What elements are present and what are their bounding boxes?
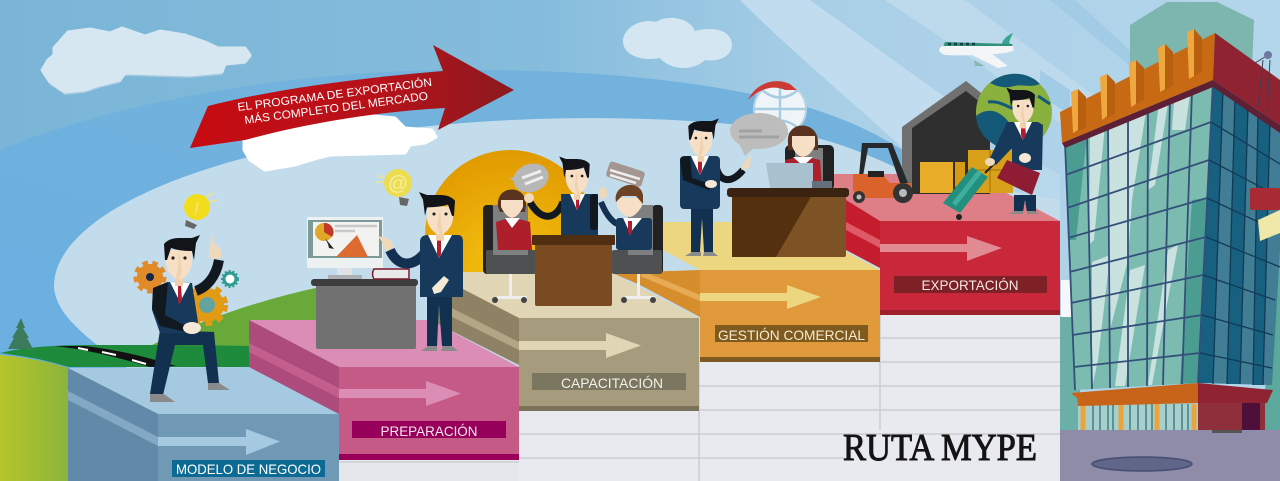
speech bubble: right xyxy=(605,161,646,187)
icon: light bulb xyxy=(184,193,217,229)
monitor with charts xyxy=(307,217,383,279)
front glass face xyxy=(1065,82,1213,390)
icon: airplane xyxy=(939,33,1014,68)
storefront xyxy=(1078,402,1198,430)
canopy xyxy=(1071,383,1198,406)
laptop xyxy=(766,163,813,188)
step: preparacion xyxy=(249,320,519,460)
label: exportacion: EXPORTACIÓN xyxy=(922,277,1018,293)
chair: right xyxy=(612,205,663,303)
step: gestion comercial xyxy=(610,222,880,362)
warehouse xyxy=(902,81,1013,194)
sun xyxy=(425,150,595,320)
step: capacitacion xyxy=(430,272,699,411)
person: seated woman with laptop xyxy=(766,126,834,190)
meeting group xyxy=(483,156,663,306)
icon: at sign bulb xyxy=(376,169,412,206)
step: modelo de negocio xyxy=(68,367,339,481)
shoes xyxy=(150,383,230,402)
cloud: upper centre xyxy=(623,18,732,68)
books xyxy=(372,269,409,279)
person: standing man xyxy=(680,118,752,256)
icon: pine tree xyxy=(8,318,33,349)
raised arm xyxy=(196,260,219,291)
icon: globe with red arrow xyxy=(748,81,806,135)
cloud: white under arrow xyxy=(244,115,436,170)
arrow: red step xyxy=(880,236,1002,261)
legs xyxy=(150,330,219,395)
antenna xyxy=(1255,51,1272,113)
speech bubble: left xyxy=(509,159,552,197)
icon: at sign bulb: @ xyxy=(388,173,408,195)
icon: gear orange large xyxy=(190,288,224,322)
icon: forklift xyxy=(853,143,913,203)
signs xyxy=(1250,188,1280,210)
label: preparacion: PREPARACIÓN xyxy=(380,423,478,439)
hills and road xyxy=(0,287,340,481)
suitcase xyxy=(943,167,988,213)
arrow: blue step xyxy=(158,429,280,455)
person: traveller xyxy=(943,88,1043,220)
arrow: pink step xyxy=(339,381,461,406)
label: preparacion xyxy=(352,421,506,439)
briefcase xyxy=(997,160,1040,195)
label: capacitacion xyxy=(532,373,686,391)
person: man standing centre xyxy=(524,156,598,236)
desk: brown xyxy=(727,188,849,257)
boxes xyxy=(920,162,953,193)
arrow: tan step xyxy=(519,333,641,358)
desk: meeting table xyxy=(532,235,615,306)
speech bubble: grey xyxy=(730,113,788,156)
window grid xyxy=(1065,82,1213,390)
icon: world globe xyxy=(976,74,1052,150)
label: modelo de negocio: MODELO DE NEGOCIO xyxy=(176,461,321,477)
person: stepping man xyxy=(150,235,230,402)
right dark face xyxy=(1198,82,1280,385)
cloud: upper left xyxy=(42,28,252,95)
roof xyxy=(1060,33,1215,143)
white block stacks xyxy=(339,312,1060,481)
glass reflections xyxy=(1089,80,1192,388)
blue swoosh band xyxy=(0,70,910,370)
label: exportacion xyxy=(894,276,1047,293)
person: woman seated left xyxy=(496,189,532,250)
manhole xyxy=(1092,457,1192,471)
icon: gear teal xyxy=(222,271,238,287)
roof battlements xyxy=(1078,29,1202,131)
chair: left xyxy=(483,205,536,303)
title: ruta mype: RUTA MYPE xyxy=(843,427,1037,469)
background teal buildings xyxy=(1060,2,1280,430)
icon: gear orange small xyxy=(137,264,163,290)
person: man seated right xyxy=(599,185,652,250)
banner arrow xyxy=(190,45,514,148)
step: exportacion xyxy=(790,174,1060,315)
banner text: EL PROGRAMA DE EXPORTACIÓN xyxy=(237,76,433,114)
building xyxy=(1060,29,1280,433)
banner text: MÁS COMPLETO DEL MERCADO xyxy=(244,90,429,127)
person: presenter xyxy=(378,192,463,351)
desk: grey xyxy=(311,279,418,349)
arrow: orange step xyxy=(700,285,821,309)
label: gestion comercial: GESTIÓN COMERCIAL xyxy=(718,327,865,343)
banner text xyxy=(237,76,433,127)
light horizon area xyxy=(54,118,1060,370)
label: capacitacion: CAPACITACIÓN xyxy=(561,375,663,391)
ground xyxy=(1060,430,1280,481)
jacket xyxy=(152,282,198,333)
